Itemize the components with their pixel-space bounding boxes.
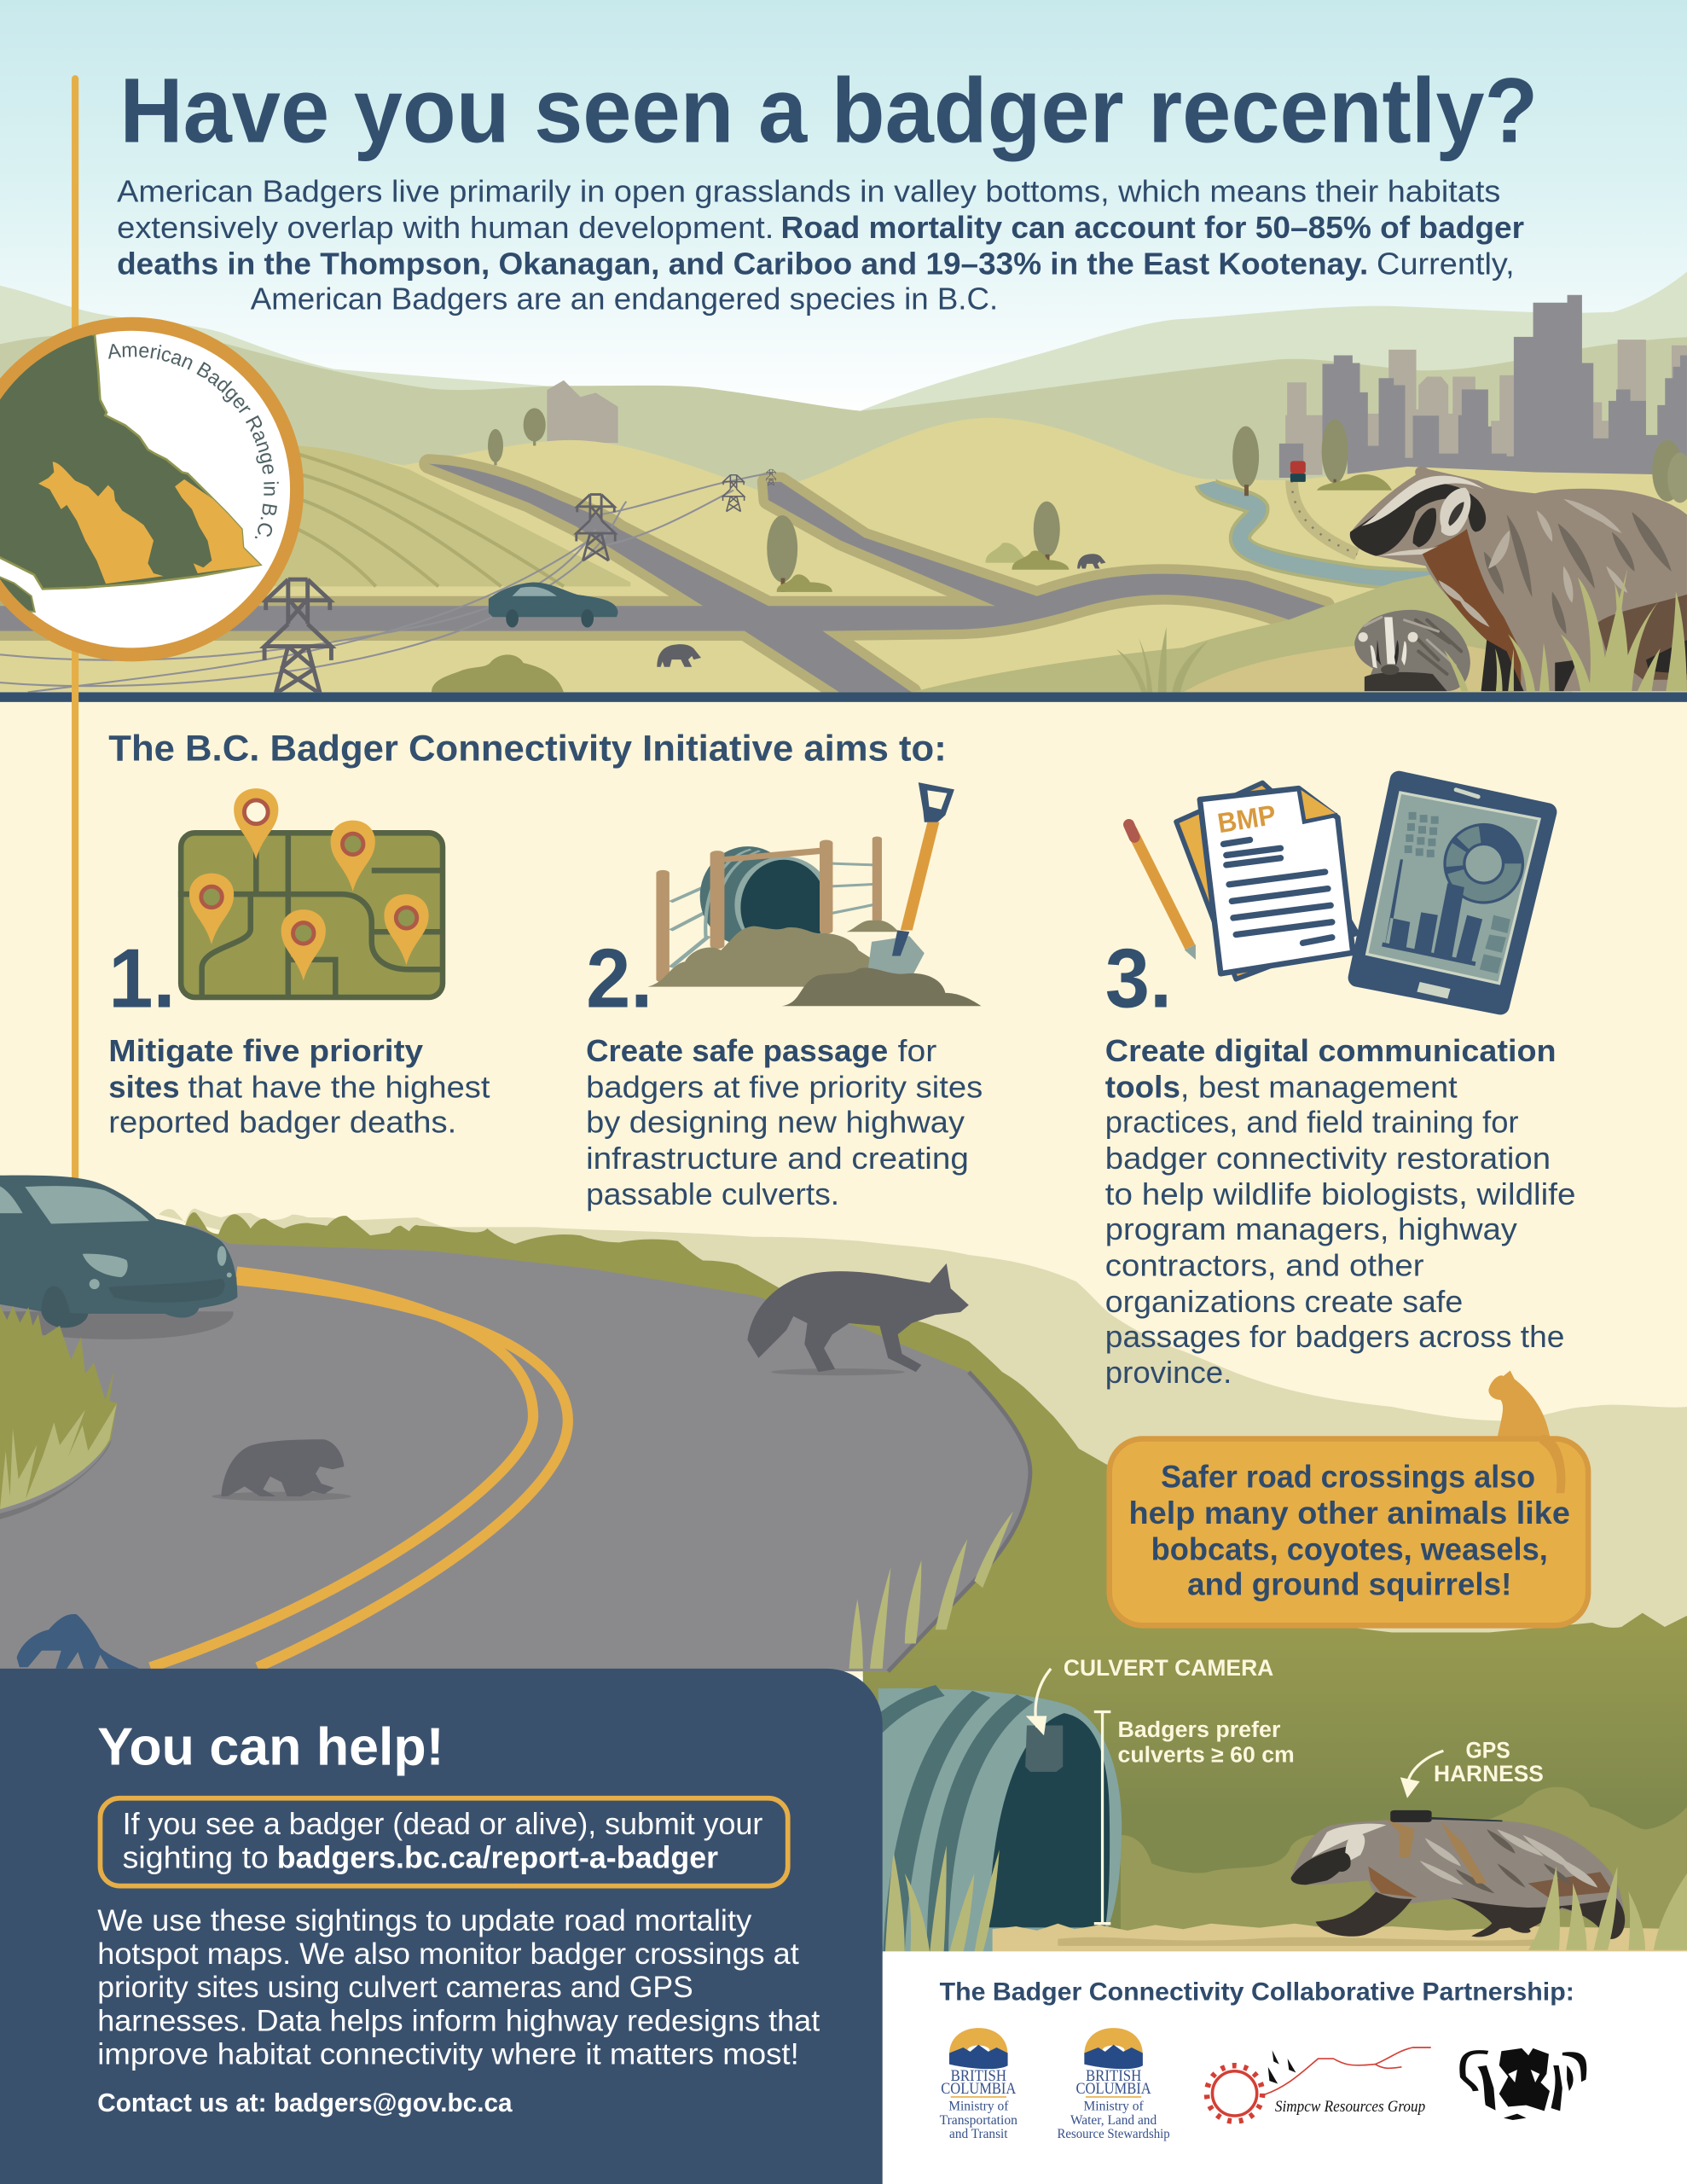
- tablet: [1357, 780, 1548, 1006]
- body: [1291, 1820, 1624, 1931]
- sighting box: If you see a badger (dead or alive), submit your: [123, 1806, 762, 1841]
- column 3 text: contractors, and other: [1105, 1248, 1424, 1283]
- column 1 text: [108, 1033, 490, 1139]
- power transmission towers: [264, 469, 776, 694]
- number 2: 2.: [586, 931, 652, 1025]
- culvert backdrop shading: [863, 1632, 1687, 1953]
- column 3 text: passages for badgers across the: [1105, 1319, 1564, 1354]
- column 3 text: province.: [1105, 1355, 1232, 1390]
- column 2 text: Create safe passage: [586, 1033, 888, 1068]
- walking badger: [1291, 1810, 1625, 1939]
- landscape divider bar: [0, 692, 1687, 702]
- front sheet: [1200, 788, 1353, 973]
- column 1 text: Mitigate five priority: [108, 1033, 423, 1068]
- far hills: [0, 271, 1687, 411]
- bushes: [432, 474, 1392, 692]
- panel paragraph: harnesses. Data helps inform highway redesigns that: [97, 2004, 820, 2037]
- logo: B.C. Ministry of Water, Land and Resource Stewardship: COLUMBIA: [1076, 2080, 1151, 2098]
- river: [1205, 484, 1434, 579]
- vertical accent line: [72, 75, 78, 1189]
- middle hills: [0, 334, 1687, 692]
- column 3 text: Create digital communication: [1105, 1033, 1557, 1068]
- intro paragraph: extensively overlap with human development.: [117, 210, 774, 245]
- callout text: [1129, 1460, 1570, 1601]
- logo: B.C. Ministry of Transportation and Transit: BRITISH: [951, 2067, 1006, 2085]
- range map circle: [0, 317, 304, 662]
- panel background: [0, 1669, 883, 2184]
- sighting box: badgers.bc.ca/report-a-badger: [277, 1839, 718, 1874]
- roadside grass clump: [0, 1306, 117, 1519]
- logo: B.C. Ministry of Transportation and Transit: Transportation: [940, 2113, 1017, 2128]
- culvert scene: [873, 1655, 1687, 1953]
- squirrel tail: [1539, 1435, 1566, 1493]
- number 1: 1.: [108, 931, 176, 1025]
- intro paragraph: American Badgers are an endangered species in B.C.: [251, 281, 998, 316]
- logo: B.C. Ministry of Water, Land and Resource Stewardship: [1058, 2028, 1170, 2141]
- column 3 text: badger connectivity restoration: [1105, 1141, 1551, 1176]
- label: GPS harness: GPS: [1466, 1737, 1510, 1763]
- pencil: [1129, 825, 1196, 960]
- farm field rows: [274, 445, 631, 588]
- car shadow and car: [0, 1176, 237, 1339]
- column 3 text: practices, and field training for: [1105, 1104, 1519, 1139]
- face: [1291, 1846, 1348, 1885]
- tablet donut chart: [1454, 834, 1513, 893]
- column 3 text: , best management: [1180, 1070, 1458, 1105]
- fur patches dark: [1484, 512, 1672, 634]
- intro paragraph: Road mortality can account for 50–85% of badger: [781, 210, 1524, 245]
- panel paragraph: improve habitat connectivity where it matters most!: [97, 2038, 799, 2071]
- map of B.C.: [0, 318, 260, 612]
- legs: [1316, 1892, 1625, 1939]
- help panel: [0, 1669, 883, 2184]
- culvert pipe: [873, 1688, 1122, 1953]
- tablet home button: [1417, 982, 1451, 999]
- callout text: Safer road crossings also: [1161, 1460, 1535, 1495]
- intro paragraph: deaths in the Thompson, Okanagan, and Cariboo and 19–33% in the East Kootenay.: [117, 247, 1368, 282]
- range map circle: American Badger Range in B.C.: [108, 344, 279, 539]
- partners background: [883, 1951, 1687, 2184]
- callout text: bobcats, coyotes, weasels,: [1151, 1532, 1548, 1567]
- icon: map with pins: [178, 788, 444, 999]
- column 1 text: reported badger deaths.: [108, 1104, 456, 1139]
- column 3 text: to help wildlife biologists, wildlife: [1105, 1176, 1575, 1211]
- cream section background: [0, 702, 1687, 1677]
- double yellow centre line: [150, 1272, 568, 1667]
- callout text: and ground squirrels!: [1187, 1566, 1511, 1601]
- trees: [488, 408, 1687, 592]
- logo: B.C. Ministry of Water, Land and Resource Stewardship: Ministry of: [1084, 2099, 1145, 2113]
- callout: other animals: [1110, 1371, 1588, 1625]
- intro paragraph: [117, 174, 1524, 316]
- callout box: [1110, 1439, 1588, 1625]
- weasel silhouette: [17, 1614, 139, 1669]
- logo: Simpcw Resources Group: [1207, 2048, 1431, 2122]
- roadside grass blades: [849, 1511, 1013, 1669]
- logo: Simpcw Resources Group: Simpcw Resources Group: [1275, 2098, 1425, 2116]
- grass tuft: [1116, 627, 1209, 692]
- panel paragraph: We use these sightings to update road mortality: [97, 1904, 752, 1937]
- background bushes: [1121, 1787, 1687, 1949]
- contact line: Contact us at: badgers@gov.bc.ca: [97, 2089, 513, 2117]
- label: culvert camera: CULVERT CAMERA: [1064, 1655, 1273, 1681]
- icon: culvert, fence and shovel: [648, 782, 981, 1006]
- front grass: [1444, 569, 1687, 691]
- foreground yellow hills: [0, 418, 1687, 692]
- document lines: [1224, 839, 1332, 943]
- callout text: help many other animals like: [1129, 1496, 1570, 1531]
- panel paragraph: [97, 1904, 820, 2071]
- panel heading: You can help!: [97, 1718, 444, 1777]
- back sheet: [1176, 783, 1357, 979]
- title: Have you seen a badger recently?: [119, 59, 1538, 162]
- logo: B.C. Ministry of Transportation and Transit: [940, 2028, 1017, 2141]
- sighting box: sighting to: [123, 1839, 269, 1874]
- tablet bar chart: [1385, 859, 1482, 962]
- logo: B.C. Ministry of Water, Land and Resource Stewardship: BRITISH: [1086, 2067, 1141, 2085]
- road surface: [0, 1226, 1030, 1671]
- landscape scene: valley with roads: [0, 271, 1687, 694]
- column 1 text: sites: [108, 1070, 180, 1105]
- column 2 text: badgers at five priority sites: [586, 1070, 983, 1105]
- intro paragraph: Currently,: [1377, 247, 1515, 282]
- logo: B.C. Ministry of Transportation and Transit: Ministry of: [948, 2099, 1009, 2113]
- sky background: [0, 0, 1687, 418]
- hill behind badgers: [914, 575, 1516, 693]
- sighting box: [101, 1798, 788, 1886]
- logo: B.C. Ministry of Transportation and Transit: and Transit: [949, 2127, 1008, 2141]
- partnership heading: The Badger Connectivity Collaborative Partnership:: [940, 1978, 1574, 2006]
- column 2 text: by designing new highway: [586, 1104, 965, 1139]
- ground strip: [993, 1924, 1687, 1953]
- bear cub silhouette: [212, 1439, 351, 1501]
- logo: B.C. Ministry of Water, Land and Resource Stewardship: Resource Stewardship: [1058, 2127, 1170, 2141]
- logo: B.C. Ministry of Water, Land and Resource Stewardship: Water, Land and: [1070, 2113, 1157, 2128]
- label: culvert size: Badgers prefer: [1118, 1716, 1280, 1742]
- label: GPS harness: HARNESS: [1434, 1761, 1544, 1786]
- panel paragraph: priority sites using culvert cameras and GPS: [97, 1971, 693, 2004]
- car on distant road: [489, 582, 618, 628]
- map disc: [0, 324, 297, 654]
- culvert grass: [885, 1845, 1000, 1953]
- coyote silhouette: [747, 1263, 969, 1375]
- curved map label: [108, 357, 264, 574]
- foreground grass: [1528, 1867, 1687, 1950]
- label: culvert size: [1118, 1716, 1295, 1767]
- tablet grid: [1405, 812, 1510, 973]
- distant buildings: [547, 380, 618, 443]
- adult badger: [1350, 467, 1687, 691]
- harness arrow: [1400, 1751, 1443, 1798]
- pale background hill: [159, 1209, 1687, 1671]
- power lines: [0, 473, 771, 692]
- column 2 text: passable culverts.: [586, 1176, 839, 1211]
- number 3: 3.: [1105, 931, 1172, 1025]
- green roadside bank: [150, 1212, 1687, 1953]
- railway and train: [1290, 461, 1357, 555]
- column 2 text: for: [898, 1033, 936, 1068]
- icon: BMP documents, pencil and tablet: [1129, 780, 1548, 1006]
- road network: [0, 464, 1325, 692]
- face: [1350, 484, 1486, 556]
- culvert camera: [1025, 1726, 1063, 1772]
- logo: B.C. Ministry of Transportation and Transit: COLUMBIA: [941, 2080, 1017, 2098]
- fur patches light: [1439, 499, 1627, 627]
- BMP label: BMP: [1215, 799, 1278, 839]
- camera arrow: [1026, 1669, 1051, 1735]
- harness: [1386, 1820, 1487, 1884]
- column 2 text: infrastructure and creating: [586, 1141, 969, 1176]
- column 1 text: that have the highest: [188, 1070, 490, 1105]
- measuring bar: [1094, 1712, 1110, 1924]
- squirrel: [1488, 1371, 1551, 1443]
- label: culvert size: culverts ≥ 60 cm: [1118, 1741, 1295, 1767]
- intro paragraph: American Badgers live primarily in open grasslands in valley bottoms, which means their habitats: [117, 174, 1500, 209]
- logo: black badger face: [1463, 2048, 1586, 2120]
- small bears: [657, 554, 1105, 667]
- road scene: [0, 1176, 1687, 1953]
- label: GPS harness: [1434, 1737, 1544, 1786]
- column 2 text: [586, 1033, 983, 1211]
- section heading: The B.C. Badger Connectivity Initiative aims to:: [108, 728, 947, 768]
- column 3 text: organizations create safe: [1105, 1284, 1463, 1319]
- badger cub: [1354, 610, 1470, 691]
- city skyline: [1279, 295, 1687, 478]
- panel paragraph: hotspot maps. We also monitor badger crossings at: [97, 1937, 799, 1971]
- column 3 text: program managers, highway: [1105, 1211, 1517, 1246]
- tablet speaker: [1456, 790, 1478, 797]
- column 3 text: [1105, 1033, 1575, 1390]
- column 3 text: tools: [1105, 1070, 1180, 1105]
